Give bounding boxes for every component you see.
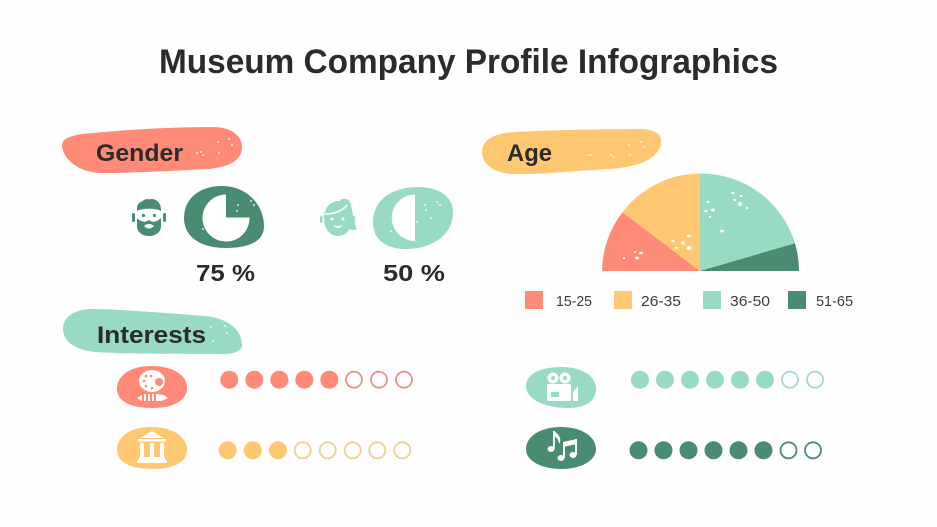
panel: interests — [63, 309, 823, 469]
legend: 51-65 — [816, 293, 853, 310]
legend: 26-35 — [641, 293, 681, 310]
value: 50 percent: 50 % — [383, 260, 445, 286]
title: Museum Company Profile Infographics — [159, 43, 778, 81]
panel: age — [482, 129, 853, 310]
chart: age semicircle — [602, 173, 799, 271]
icon: museum building — [117, 427, 187, 469]
legend: 15-25 — [556, 293, 592, 310]
icon: man face — [132, 199, 166, 236]
panel: gender — [62, 127, 453, 286]
icon: woman face — [320, 199, 357, 236]
heading: interests: Interests — [97, 322, 206, 349]
icon: palette and brush — [117, 366, 187, 408]
legend — [525, 291, 853, 310]
heading: age — [482, 129, 661, 174]
rating: art dots — [220, 371, 412, 389]
rating: museum dots — [219, 441, 410, 459]
icon: film camera — [526, 367, 596, 408]
heading: interests — [63, 309, 242, 354]
chart: female share 50 percent — [373, 187, 453, 249]
value: 75 percent: 75 % — [196, 260, 255, 286]
heading: gender: Gender — [96, 140, 183, 167]
chart: male share 75 percent — [184, 186, 264, 248]
heading: age: Age — [507, 140, 552, 167]
icon: music notes — [526, 427, 596, 469]
heading: gender — [62, 127, 242, 173]
legend: 36-50 — [730, 293, 770, 310]
rating: music dots — [630, 441, 821, 459]
rating: film dots — [631, 371, 823, 389]
